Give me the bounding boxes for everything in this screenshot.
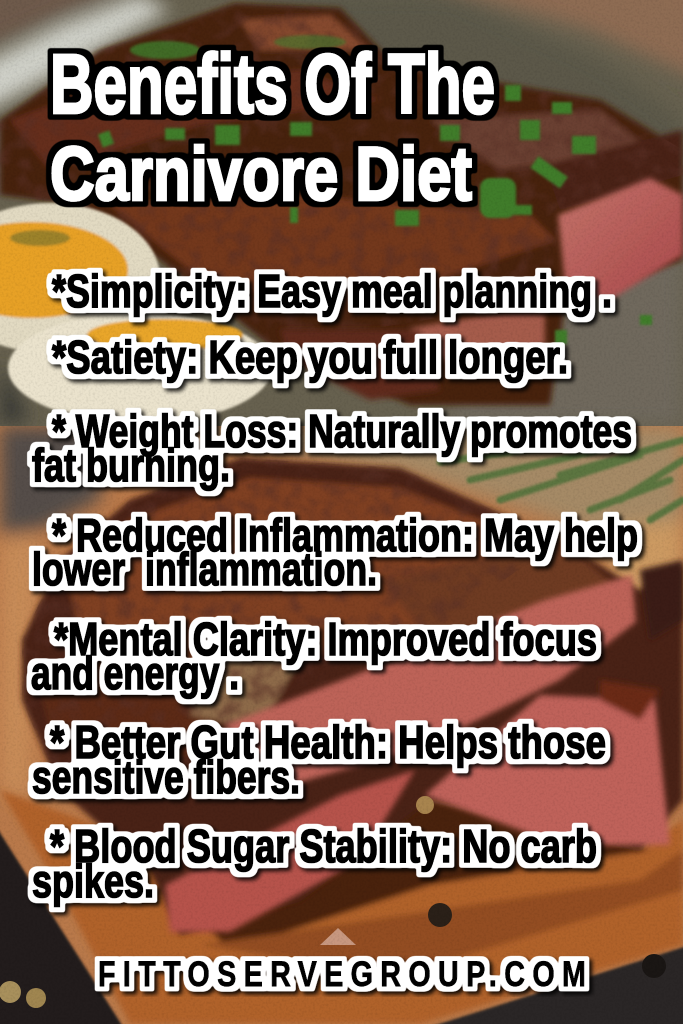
texture: plate speckle [0,0,683,426]
texture: crust char [4,13,672,329]
dark table corners [0,825,683,1024]
website footer: FITTOSERVEGROUP.COM [98,954,586,994]
texture: crust char [22,458,516,754]
photo: steak and eggs on a plate [0,0,683,426]
benefit: satiety: *Satiety: Keep you full longer. [52,331,568,383]
cutting board [0,790,683,1024]
benefit: reduced inflammation [32,509,638,595]
photo: sliced steak on a wooden board [0,426,683,1024]
icon: rosemary sprig [440,440,683,520]
steak: pink cut faces [165,560,683,932]
title [50,37,495,217]
benefit: better gut health: sensitive fibers. [32,751,300,803]
benefit: reduced inflammation: lower inflammation. [32,543,377,595]
title: Benefits Of The [50,37,495,131]
benefit: mental clarity [31,613,597,699]
title: Carnivore Diet [50,132,472,217]
benefit: blood sugar stability [32,820,597,907]
icon: green chive garnish [98,35,652,344]
icon: boiled egg lower [8,313,272,423]
meat: pink cut faces [280,178,683,400]
benefit: better gut health [32,716,606,803]
benefit: weight loss: fat burning. [32,439,230,491]
peppercorns and salt [0,796,666,1008]
steak: seared crust [22,458,683,935]
benefits list [31,265,638,907]
icon: boiled egg upper [0,203,160,353]
benefit: blood sugar stability: spikes. [32,855,154,907]
meat: seared crust [0,3,683,405]
benefit: weight loss [32,405,632,491]
texture: board speckle [0,426,683,1024]
benefit: mental clarity: and energy . [31,647,239,699]
